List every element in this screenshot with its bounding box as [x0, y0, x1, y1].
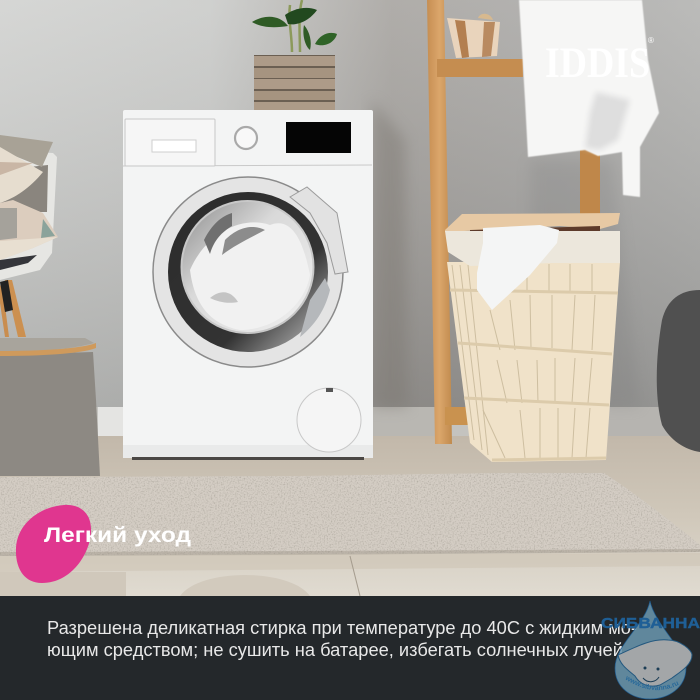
grey pouf [657, 290, 700, 452]
lower rung [445, 407, 469, 425]
heading: Легкий уход [44, 524, 191, 547]
control knob [235, 127, 257, 149]
wooden bucket [447, 14, 500, 58]
crate planter with plant [252, 0, 337, 110]
right post [580, 100, 600, 215]
towel [477, 225, 559, 310]
water drop [615, 601, 686, 699]
detergent drawer [125, 119, 215, 166]
door handle [290, 187, 348, 274]
hamper lid [445, 213, 620, 232]
filter hatch [297, 388, 361, 452]
white bathrobe [519, 0, 659, 197]
bathtub [618, 640, 692, 686]
display [286, 122, 351, 153]
machine feet [132, 457, 364, 460]
hamper liner [445, 231, 620, 266]
description text: Разрешена деликатная стирка при температуре до 40С с жидким мо- [47, 618, 637, 638]
floor reflections [0, 553, 700, 596]
chair shell [0, 150, 57, 280]
rug [0, 473, 700, 556]
machine body [123, 110, 373, 458]
door [153, 177, 343, 367]
hamper body [447, 262, 620, 462]
wooden ladder shelf [427, 0, 600, 444]
chair legs [5, 280, 26, 337]
watermark url: www.sibvanna.ru [626, 676, 679, 690]
IDDIS logo: IDDIS [545, 40, 650, 87]
upper pillow [0, 135, 53, 167]
washing machine [123, 110, 373, 460]
grey fabric basket [0, 338, 100, 476]
description text: ющим средством; не сушить на батарее, избегать солнечных лучей. [47, 640, 628, 660]
bottom dark panel [0, 596, 700, 700]
watermark: Sibvanna logo [601, 600, 700, 700]
hamper bands [450, 290, 618, 460]
IDDIS logo: ® [648, 36, 654, 45]
crate [254, 55, 335, 110]
dark cushion [0, 255, 37, 270]
pink blob badge [16, 505, 91, 583]
watermark name: СИБВАННА [601, 615, 700, 632]
description text [47, 618, 637, 660]
hamper slats [452, 264, 595, 458]
lower pillow [0, 200, 58, 260]
left post [427, 0, 452, 444]
shelf board [437, 59, 523, 77]
laundry hamper [445, 213, 620, 462]
chair with pillows [0, 135, 58, 337]
plant [252, 0, 337, 52]
